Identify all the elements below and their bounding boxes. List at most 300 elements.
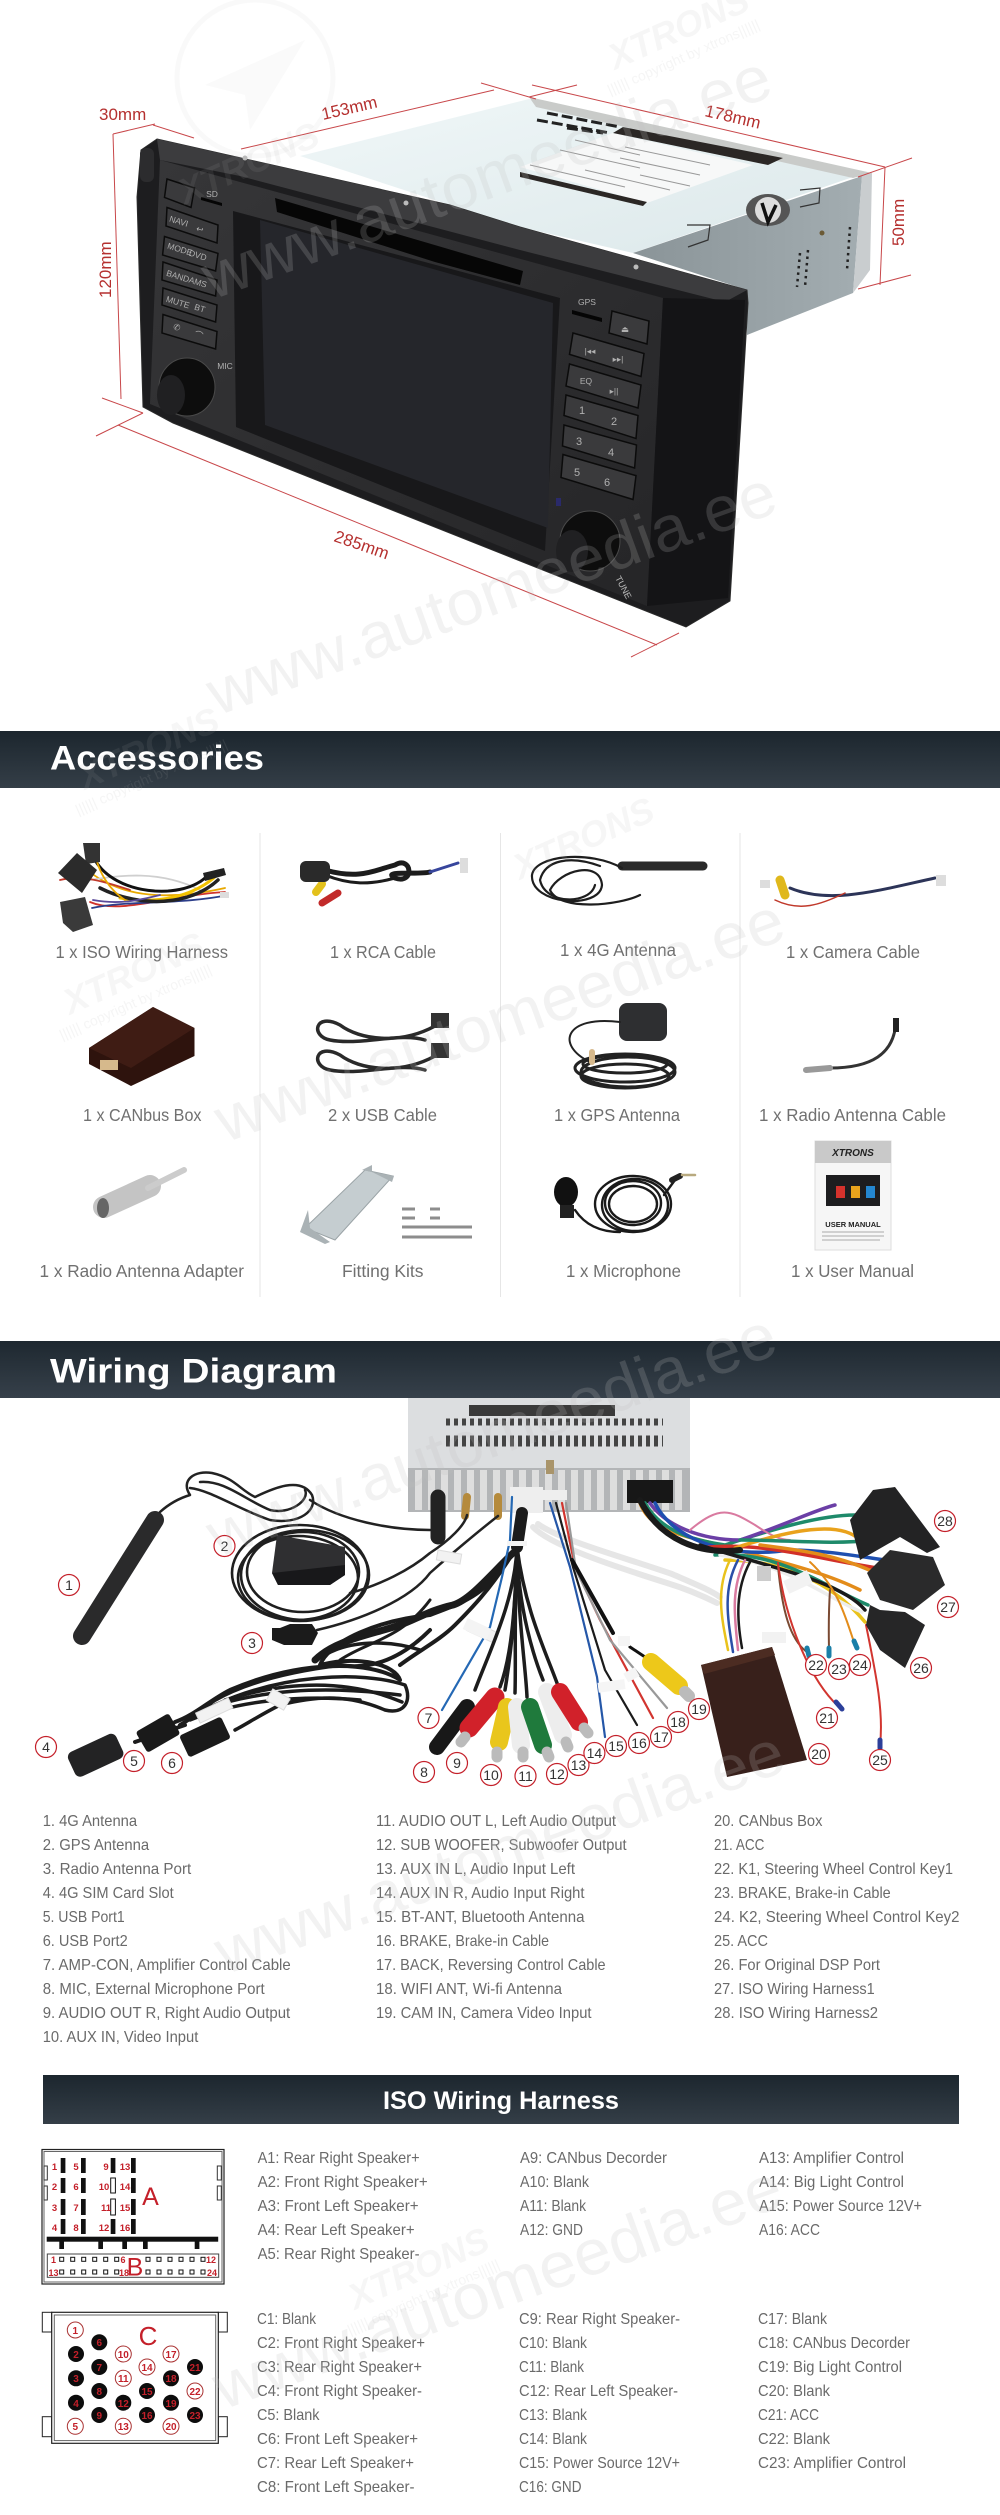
text block: C pin list column 2: C10: Blank (519, 2335, 588, 2352)
right bezel (647, 298, 745, 606)
pin numbers C: 23 (189, 2411, 201, 2422)
pin numbers A: 11 (101, 2203, 112, 2214)
letter A: A (142, 2183, 159, 2211)
text block: A pin list column 3: A16: ACC (759, 2222, 820, 2239)
right button captions: 3 (576, 436, 582, 448)
right button captions: 2 (611, 416, 617, 428)
B pin numbers: 6 (120, 2255, 126, 2265)
display screen (260, 220, 553, 528)
text block: C pin list column 1: C2: Front Right Speaker+ (257, 2335, 425, 2352)
item: GPS antenna: 1 x GPS Antenna (554, 1105, 680, 1125)
text block: wiring legend column 1: 3. Radio Antenna Port (43, 1861, 192, 1878)
pin numbers A: 2 (52, 2182, 57, 2193)
numbered callouts: 17 (653, 1729, 669, 1745)
USB port 1 (136, 1713, 180, 1753)
text block: C pin list column 1: C7: Rear Left Speaker+ (257, 2455, 414, 2472)
text block: wiring legend column 2: 19. CAM IN, Camera Video Input (376, 2005, 592, 2022)
text block: wiring legend column 1: 7. AMP-CON, Amplifier Control Cable (43, 1957, 291, 1974)
watermarks: XTRONS (505, 789, 660, 888)
numbered callouts: 10 (483, 1767, 499, 1783)
left button captions: ↩ (195, 223, 206, 235)
right button captions: EQ (580, 376, 593, 386)
pin numbers C: 20 (165, 2422, 177, 2433)
harness lower branch (721, 1560, 750, 1652)
dimension label: 178mm: 178mm (703, 101, 763, 133)
pin numbers A: 10 (99, 2182, 109, 2193)
text block: wiring legend column 3: 25. ACC (714, 1933, 768, 1950)
item: CANbus box: 1 x CANbus Box (83, 1105, 202, 1125)
pin numbers C: 18 (165, 2374, 177, 2385)
pin blocks A (61, 2158, 136, 2234)
numbered callouts: 18 (670, 1714, 686, 1730)
cable tie and AMP label (463, 1541, 527, 1640)
text block: C pin list column 1 (257, 2311, 425, 2496)
right button captions: 6 (604, 477, 610, 489)
pin numbers C: 17 (165, 2350, 177, 2361)
GPS antenna lead (350, 1515, 467, 1593)
item: user manual: 1 x User Manual (791, 1261, 914, 1281)
pin numbers C: 8 (97, 2387, 103, 2398)
4G antenna lead (160, 1472, 430, 1530)
pin numbers C: 4 (73, 2399, 79, 2410)
numbered callouts: 25 (872, 1752, 888, 1768)
USB port 2 (179, 1716, 231, 1758)
divider bar with teeth (47, 2237, 218, 2249)
right tune knob (556, 511, 620, 572)
connector diagram A and B (42, 2150, 224, 2284)
left button captions: NAVI (168, 214, 190, 229)
item: USB cables: 2 x USB Cable (328, 1105, 437, 1125)
left button captions: MUTE (165, 294, 191, 311)
watermarks: www.automeedia.ee (191, 40, 781, 314)
right button captions: 1 (579, 405, 585, 417)
pin numbers C: 12 (118, 2399, 129, 2410)
B contacts (60, 2257, 205, 2274)
text block: wiring legend column 1: 8. MIC, External Microphone Port (43, 1981, 265, 1998)
dimension label: 285mm: 285mm (332, 527, 391, 563)
left button captions: SD (206, 189, 218, 199)
item: user manual: USER MANUAL (825, 1220, 881, 1229)
text block: wiring legend column 2 (376, 1813, 627, 2022)
text block: wiring legend column 3: 26. For Original DSP Port (714, 1957, 881, 1974)
left button captions (165, 189, 233, 371)
watermarks: |||||| copyright by xtrons|||||| (73, 736, 230, 818)
text block: C pin list column 2: C14: Blank (519, 2431, 588, 2448)
text block: C pin list column 1: C4: Front Right Speaker- (257, 2383, 422, 2400)
tune label: TUNE (613, 574, 634, 601)
text block: wiring legend column 2: 11. AUDIO OUT L, Left Audio Output (376, 1813, 617, 1830)
key and ACC wires (778, 1562, 881, 1748)
pin numbers C: 3 (73, 2374, 79, 2385)
watermarks: www.automeedia.ee (202, 2150, 792, 2424)
text block: C pin list column 2 (519, 2311, 680, 2496)
letter C: C (139, 2321, 157, 2351)
text block: wiring legend column 1: 6. USB Port2 (43, 1933, 128, 1950)
pin numbers C: 5 (73, 2422, 79, 2433)
heading: Accessories (0, 731, 1000, 788)
side vent dots (797, 227, 850, 287)
item: user manual: XTRONS (831, 1148, 874, 1159)
text block: C pin list column 2: C11: Blank (519, 2359, 585, 2376)
right button captions: 4 (608, 447, 614, 459)
watermarks: XTRONS (55, 924, 210, 1023)
watermarks (55, 0, 794, 2424)
item: fitting kits (300, 1165, 472, 1281)
head unit heat sink (408, 1468, 690, 1512)
numbered callouts: 12 (549, 1766, 565, 1782)
harness wire bundle (640, 1500, 890, 1622)
text block: C pin list column 2: C9: Rear Right Speaker- (519, 2311, 680, 2328)
text block: C pin list column 1: C6: Front Left Speaker+ (257, 2431, 418, 2448)
watermarks: XTRONS (170, 114, 325, 213)
item: camera cable: 1 x Camera Cable (786, 942, 920, 962)
white flat cable (533, 1524, 720, 1603)
B pin numbers: 1 (51, 2255, 56, 2265)
left button captions: ⌒ (193, 329, 205, 341)
pin numbers A: 6 (73, 2182, 79, 2193)
pin numbers A (52, 2162, 131, 2234)
head unit vents (446, 1418, 663, 1426)
pin numbers A: 12 (99, 2223, 109, 2234)
numbered callouts: 20 (811, 1746, 827, 1762)
numbered callouts: 14 (587, 1745, 602, 1761)
text block: C pin list column 3: C18: CANbus Decorder (758, 2335, 911, 2352)
left button captions: MIC (217, 361, 233, 371)
item: RCA cable (300, 858, 468, 962)
watermarks: XTRONS (70, 699, 225, 798)
numbered callouts: 15 (608, 1738, 624, 1754)
text block: wiring legend column 2: 16. BRAKE, Brake-in Cable (376, 1933, 549, 1950)
text block: C pin list column 3: C23: Amplifier Control (758, 2455, 906, 2472)
pin numbers A: 4 (52, 2223, 58, 2234)
text block: A pin list column 2: A9: CANbus Decorder (520, 2150, 668, 2167)
numbered callouts: 7 (425, 1710, 433, 1726)
right button column (561, 311, 649, 500)
side logo badge (746, 194, 790, 226)
top screws (242, 156, 638, 270)
chassis top surface (300, 99, 853, 253)
item: ISO wiring harness (56, 843, 229, 962)
text block: wiring legend column 3: 23. BRAKE, Brake-in Cable (714, 1885, 891, 1902)
CD slot (275, 198, 523, 285)
connector side tabs (44, 2166, 221, 2200)
item: radio antenna cable (759, 1018, 946, 1125)
text block: C pin list column 3: C17: Blank (758, 2311, 828, 2328)
front panel top rim (157, 139, 747, 302)
numbered callouts: 4 (42, 1739, 50, 1755)
numbered callouts: 22 (808, 1657, 824, 1673)
text block: wiring legend column 3: 22. K1, Steering Wheel Control Key1 (714, 1861, 953, 1878)
watermarks: www.automeedia.ee (204, 883, 794, 1157)
right button captions (574, 297, 629, 489)
left button column (162, 179, 218, 349)
chassis right side (633, 176, 862, 335)
panel: accessories grid (40, 833, 946, 1297)
left button captions: AMS (188, 275, 208, 290)
text block: wiring legend column 2: 14. AUX IN R, Audio Input Right (376, 1885, 585, 1902)
text block: A pin list column 1: A1: Rear Right Speaker+ (258, 2150, 420, 2167)
numbered callouts: 23 (831, 1661, 847, 1677)
text block: C pin list column 3: C22: Blank (758, 2431, 831, 2448)
text block: A pin list column 2: A10: Blank (520, 2174, 590, 2191)
left volume knob (157, 358, 215, 416)
head unit label (469, 1405, 615, 1416)
item: microphone: 1 x Microphone (566, 1261, 681, 1281)
text block: A pin list column 1: A3: Front Left Speaker+ (258, 2198, 419, 2215)
item: RCA cable: 1 x RCA Cable (330, 942, 436, 962)
USB and SIM cable bundle (135, 1553, 513, 1742)
ISO harness connector 27 (867, 1550, 945, 1610)
numbered callouts: 9 (453, 1755, 461, 1771)
B pin numbers: 18 (119, 2268, 129, 2278)
open pins (67, 2322, 203, 2434)
B pin numbers: 24 (207, 2268, 217, 2278)
item: USB cables (318, 1013, 449, 1125)
pin numbers C: 14 (141, 2363, 153, 2374)
pin numbers C: 19 (165, 2399, 177, 2410)
AMP-CON blue wire (442, 1497, 512, 1710)
wire label tags (757, 1566, 813, 1643)
left button captions: BAND (165, 268, 191, 284)
connector diagram C (42, 2312, 227, 2443)
text block: wiring legend column 3: 28. ISO Wiring Harness2 (714, 2005, 878, 2022)
pin numbers C: 1 (73, 2326, 79, 2337)
text block: A pin list column 2: A12: GND (520, 2222, 583, 2239)
dimension label: 50mm: 50mm (889, 199, 908, 246)
text block: A pin list column 1: A5: Rear Right Speaker- (258, 2246, 420, 2263)
item: ISO wiring harness: 1 x ISO Wiring Harness (56, 942, 228, 962)
item: radio antenna cable: 1 x Radio Antenna Cable (759, 1105, 946, 1125)
text block: A pin list column 3: A13: Amplifier Control (759, 2150, 904, 2167)
text block: A pin list column 1: A2: Front Right Speaker+ (258, 2174, 428, 2191)
text block: wiring legend column 1: 4. 4G SIM Card Slot (43, 1885, 174, 1902)
text block: wiring legend column 3: 27. ISO Wiring Harness1 (714, 1981, 875, 1998)
text block: wiring legend column 3: 20. CANbus Box (714, 1813, 822, 1830)
text block: C pin list column 2: C13: Blank (519, 2407, 588, 2424)
text block: wiring legend column 1 (43, 1813, 291, 2046)
pin numbers C: 10 (118, 2350, 129, 2361)
product sticker (520, 133, 753, 203)
item: 4G antenna: 1 x 4G Antenna (560, 940, 676, 960)
camera video plug (651, 1662, 689, 1696)
ISO harness connector 28 (850, 1487, 940, 1560)
pin panel B (47, 2254, 219, 2277)
item: user manual (791, 1141, 914, 1281)
text block: wiring legend column 2: 13. AUX IN L, Audio Input Left (376, 1861, 576, 1878)
right button captions: |◂◂ (585, 346, 596, 356)
numbered callouts: 11 (518, 1768, 533, 1784)
watermarks: www.automeedia.ee (196, 1298, 786, 1572)
text block: wiring legend column 3 (714, 1813, 960, 2022)
watermarks: www.automeedia.ee (196, 456, 786, 730)
B pin numbers: 12 (206, 2255, 216, 2265)
numbered callouts: 24 (852, 1657, 868, 1673)
text block: A pin list column 1: A4: Rear Left Speaker+ (258, 2222, 415, 2239)
item: camera cable (760, 875, 946, 962)
text block: C pin list column 2: C15: Power Source 12V+ (519, 2455, 680, 2472)
B pin numbers: 13 (48, 2268, 59, 2278)
pin numbers C (73, 2326, 201, 2433)
text block: wiring legend column 2: 15. BT-ANT, Bluetooth Antenna (376, 1909, 585, 1926)
right button captions: 5 (574, 467, 580, 479)
text block: wiring legend column 1: 1. 4G Antenna (43, 1813, 137, 1830)
watermarks: www.automeedia.ee (204, 1715, 794, 1989)
cable label tags (196, 1550, 497, 1723)
GPS antenna module (272, 1535, 345, 1585)
heading: Accessories: Accessories (50, 740, 264, 778)
dimension lines (96, 83, 912, 657)
right wire fan (550, 1503, 667, 1737)
text block: A pin list column 3: A14: Big Light Control (759, 2174, 904, 2191)
numbered callouts: 28 (937, 1513, 953, 1529)
heading: ISO Wiring Harness (43, 2075, 959, 2124)
left button captions: DVD (188, 248, 208, 263)
watermarks: |||||| copyright by xtrons|||||| (605, 16, 762, 98)
pin numbers A: 1 (52, 2162, 58, 2173)
pin numbers A: 5 (73, 2162, 79, 2173)
4G antenna (82, 1520, 155, 1636)
fan label tags (597, 1636, 640, 1693)
heading: Wiring Diagram (0, 1341, 1000, 1398)
text block: wiring legend column 2: 17. BACK, Reversing Control Cable (376, 1957, 606, 1974)
SIM card dongle (66, 1732, 125, 1779)
left button captions: BT (193, 302, 207, 315)
heading: Wiring Diagram: Wiring Diagram (50, 1352, 337, 1390)
dimension label: 153mm: 153mm (320, 93, 379, 124)
text block: wiring legend column 1: 5. USB Port1 (43, 1909, 125, 1926)
item: fitting kits: Fitting Kits (342, 1261, 424, 1281)
sticker dark band bottom (520, 172, 647, 206)
pin numbers A: 15 (120, 2203, 131, 2214)
right button captions: ▸|| (610, 386, 618, 396)
text block: wiring legend column 2: 18. WIFI ANT, Wi-fi Antenna (376, 1981, 562, 1998)
RCA plugs (437, 1692, 588, 1757)
pin numbers C: 13 (118, 2422, 129, 2433)
text block: C pin list column 1: C8: Front Left Speaker- (257, 2479, 414, 2496)
numbered callouts: 19 (691, 1701, 707, 1717)
heading: ISO Wiring Harness: ISO Wiring Harness (383, 2087, 619, 2115)
text block: C pin list column 3: C21: ACC (758, 2407, 819, 2424)
left corner cap (140, 148, 154, 182)
right button captions: GPS (578, 297, 596, 307)
pin numbers C: 22 (189, 2387, 201, 2398)
text block: A pin list column 3: A15: Power Source 12V+ (759, 2198, 922, 2215)
right button captions: ⏏ (621, 324, 629, 334)
numbered callouts: 8 (420, 1764, 428, 1780)
text block: C pin list column 3: C20: Blank (758, 2383, 831, 2400)
radio antenna cable (272, 1516, 498, 1645)
text block: wiring legend column 1: 2. GPS Antenna (43, 1837, 149, 1854)
pin numbers C: 2 (73, 2350, 79, 2361)
pin numbers A: 16 (120, 2223, 130, 2234)
SD card slot (201, 197, 222, 206)
top vents (537, 113, 620, 133)
watermarks: |||||| copyright by xtrons|||||| (345, 2256, 502, 2338)
numbered callouts: 3 (248, 1635, 256, 1651)
text block: A pin list column 1 (258, 2150, 428, 2263)
text block: C pin list column 1: C5: Blank (257, 2407, 320, 2424)
text block: C pin list column 1: C3: Rear Right Speaker+ (257, 2359, 422, 2376)
text block: C pin list column 1: C1: Blank (257, 2311, 317, 2328)
left button captions: MODE (166, 241, 194, 258)
left button captions: ✆ (172, 321, 183, 333)
text block: wiring legend column 3: 24. K2, Steering Wheel Control Key2 (714, 1909, 960, 1926)
pin numbers A: 7 (73, 2203, 79, 2214)
RCA wire fan (475, 1513, 557, 1697)
watermarks: |||||| copyright by xtrons|||||| (57, 961, 214, 1043)
dimension label: 30mm: 30mm (99, 105, 146, 124)
pin numbers C: 9 (97, 2411, 103, 2422)
text block: wiring legend column 3: 21. ACC (714, 1837, 764, 1854)
pin numbers C: 11 (118, 2374, 129, 2385)
text block: C pin list column 3 (758, 2311, 911, 2472)
pin numbers C: 6 (97, 2338, 103, 2349)
right button captions: ▸▸| (613, 354, 623, 364)
panel: product dimensions photo (96, 83, 912, 657)
pin numbers A: 9 (103, 2162, 109, 2173)
letter B: B (127, 2254, 143, 2282)
item: radio antenna adapter: 1 x Radio Antenna Adapter (40, 1261, 244, 1281)
numbered callouts: 26 (913, 1660, 929, 1676)
wiring diagram photo (36, 1398, 958, 1786)
pin numbers A: 13 (120, 2162, 130, 2173)
pin numbers C: 16 (141, 2411, 153, 2422)
side screw (820, 230, 824, 236)
item: CANbus box (83, 1007, 202, 1125)
rear connectors (438, 1460, 673, 1537)
filled pins (68, 2334, 203, 2423)
sticker diagram lines (530, 140, 710, 190)
pin numbers C: 15 (141, 2387, 153, 2398)
item: radio antenna adapter (40, 1170, 244, 1281)
text block: C pin list column 2: C12: Rear Left Speaker- (519, 2383, 678, 2400)
pin numbers A: 14 (120, 2182, 131, 2193)
B pin numbers (48, 2255, 217, 2278)
item: microphone (554, 1175, 695, 1281)
numbered callouts: 5 (130, 1753, 138, 1769)
DSP connector 26 (866, 1605, 925, 1668)
pin numbers C: 21 (189, 2363, 201, 2374)
text block: C pin list column 2: C16: GND (519, 2479, 582, 2496)
numbered callouts: 13 (571, 1757, 586, 1773)
side tabs (42, 2312, 227, 2437)
text block: wiring legend column 2: 12. SUB WOOFER, Subwoofer Output (376, 1837, 627, 1854)
text block: A pin list column 2 (520, 2150, 668, 2239)
front panel face (150, 160, 663, 606)
status LED (556, 498, 561, 506)
side clips (687, 188, 820, 247)
item: GPS antenna (554, 1003, 680, 1125)
GPS antenna coil (232, 1525, 369, 1621)
display recess (233, 211, 560, 551)
sticker dark band top (613, 127, 783, 165)
numbered callouts (36, 1510, 958, 1786)
numbered callouts: 21 (819, 1710, 835, 1726)
front panel frame (137, 139, 748, 627)
numbered callouts: 2 (221, 1538, 229, 1554)
pin numbers A: 3 (52, 2203, 57, 2214)
CANbus box (701, 1647, 807, 1777)
watermarks: XTRONS (340, 2219, 495, 2318)
silver chassis edge strip (529, 97, 872, 178)
numbered callouts: 16 (631, 1735, 647, 1751)
text block: A pin list column 2: A11: Blank (520, 2198, 587, 2215)
text block: wiring legend column 1: 9. AUDIO OUT R, Right Audio Output (43, 2005, 291, 2022)
head unit rear top (408, 1398, 690, 1468)
outer frame (52, 2312, 218, 2443)
numbered callouts: 27 (940, 1599, 956, 1615)
text block: A pin list column 3 (759, 2150, 922, 2239)
